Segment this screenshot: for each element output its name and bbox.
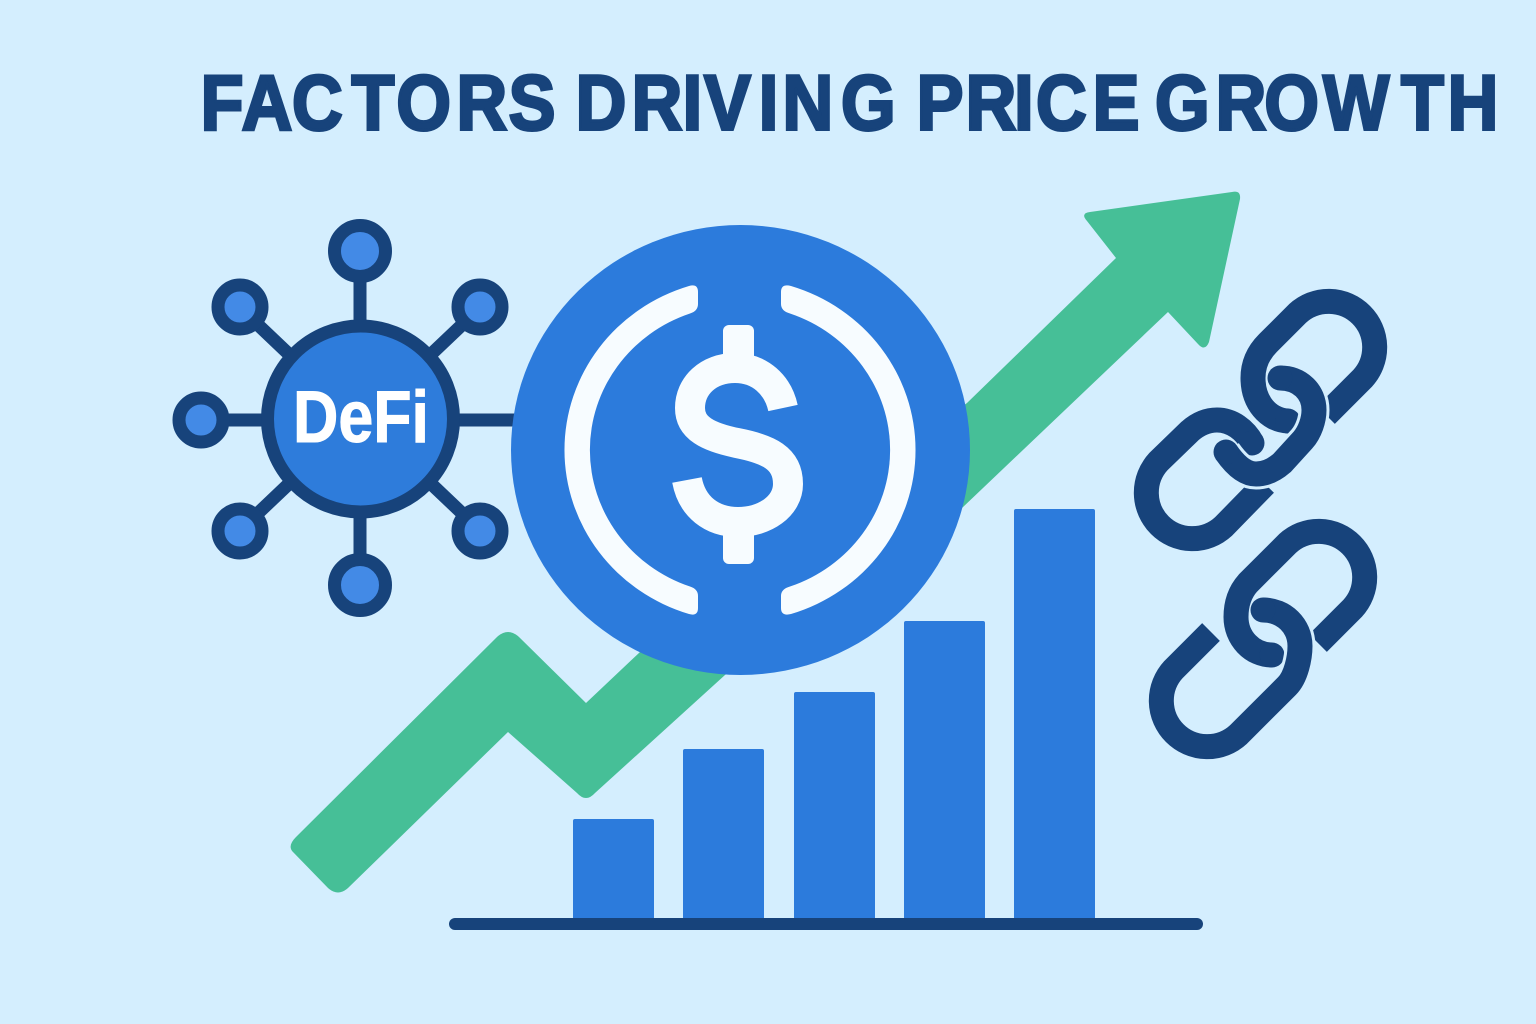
USD coin: [511, 225, 970, 675]
bar chart: [573, 509, 1095, 920]
dollar sign: [687, 325, 788, 564]
DeFi network icon: [179, 226, 520, 610]
green growth arrow: [291, 192, 1240, 893]
chart baseline: [449, 918, 1203, 930]
broken chain links, lower pair: [1161, 531, 1365, 747]
DeFi label: DeFi: [293, 377, 429, 458]
broken chain links, upper pair: [1146, 301, 1375, 539]
title: FACTORS DRIVING PRICE GROWTH: [201, 59, 1498, 147]
